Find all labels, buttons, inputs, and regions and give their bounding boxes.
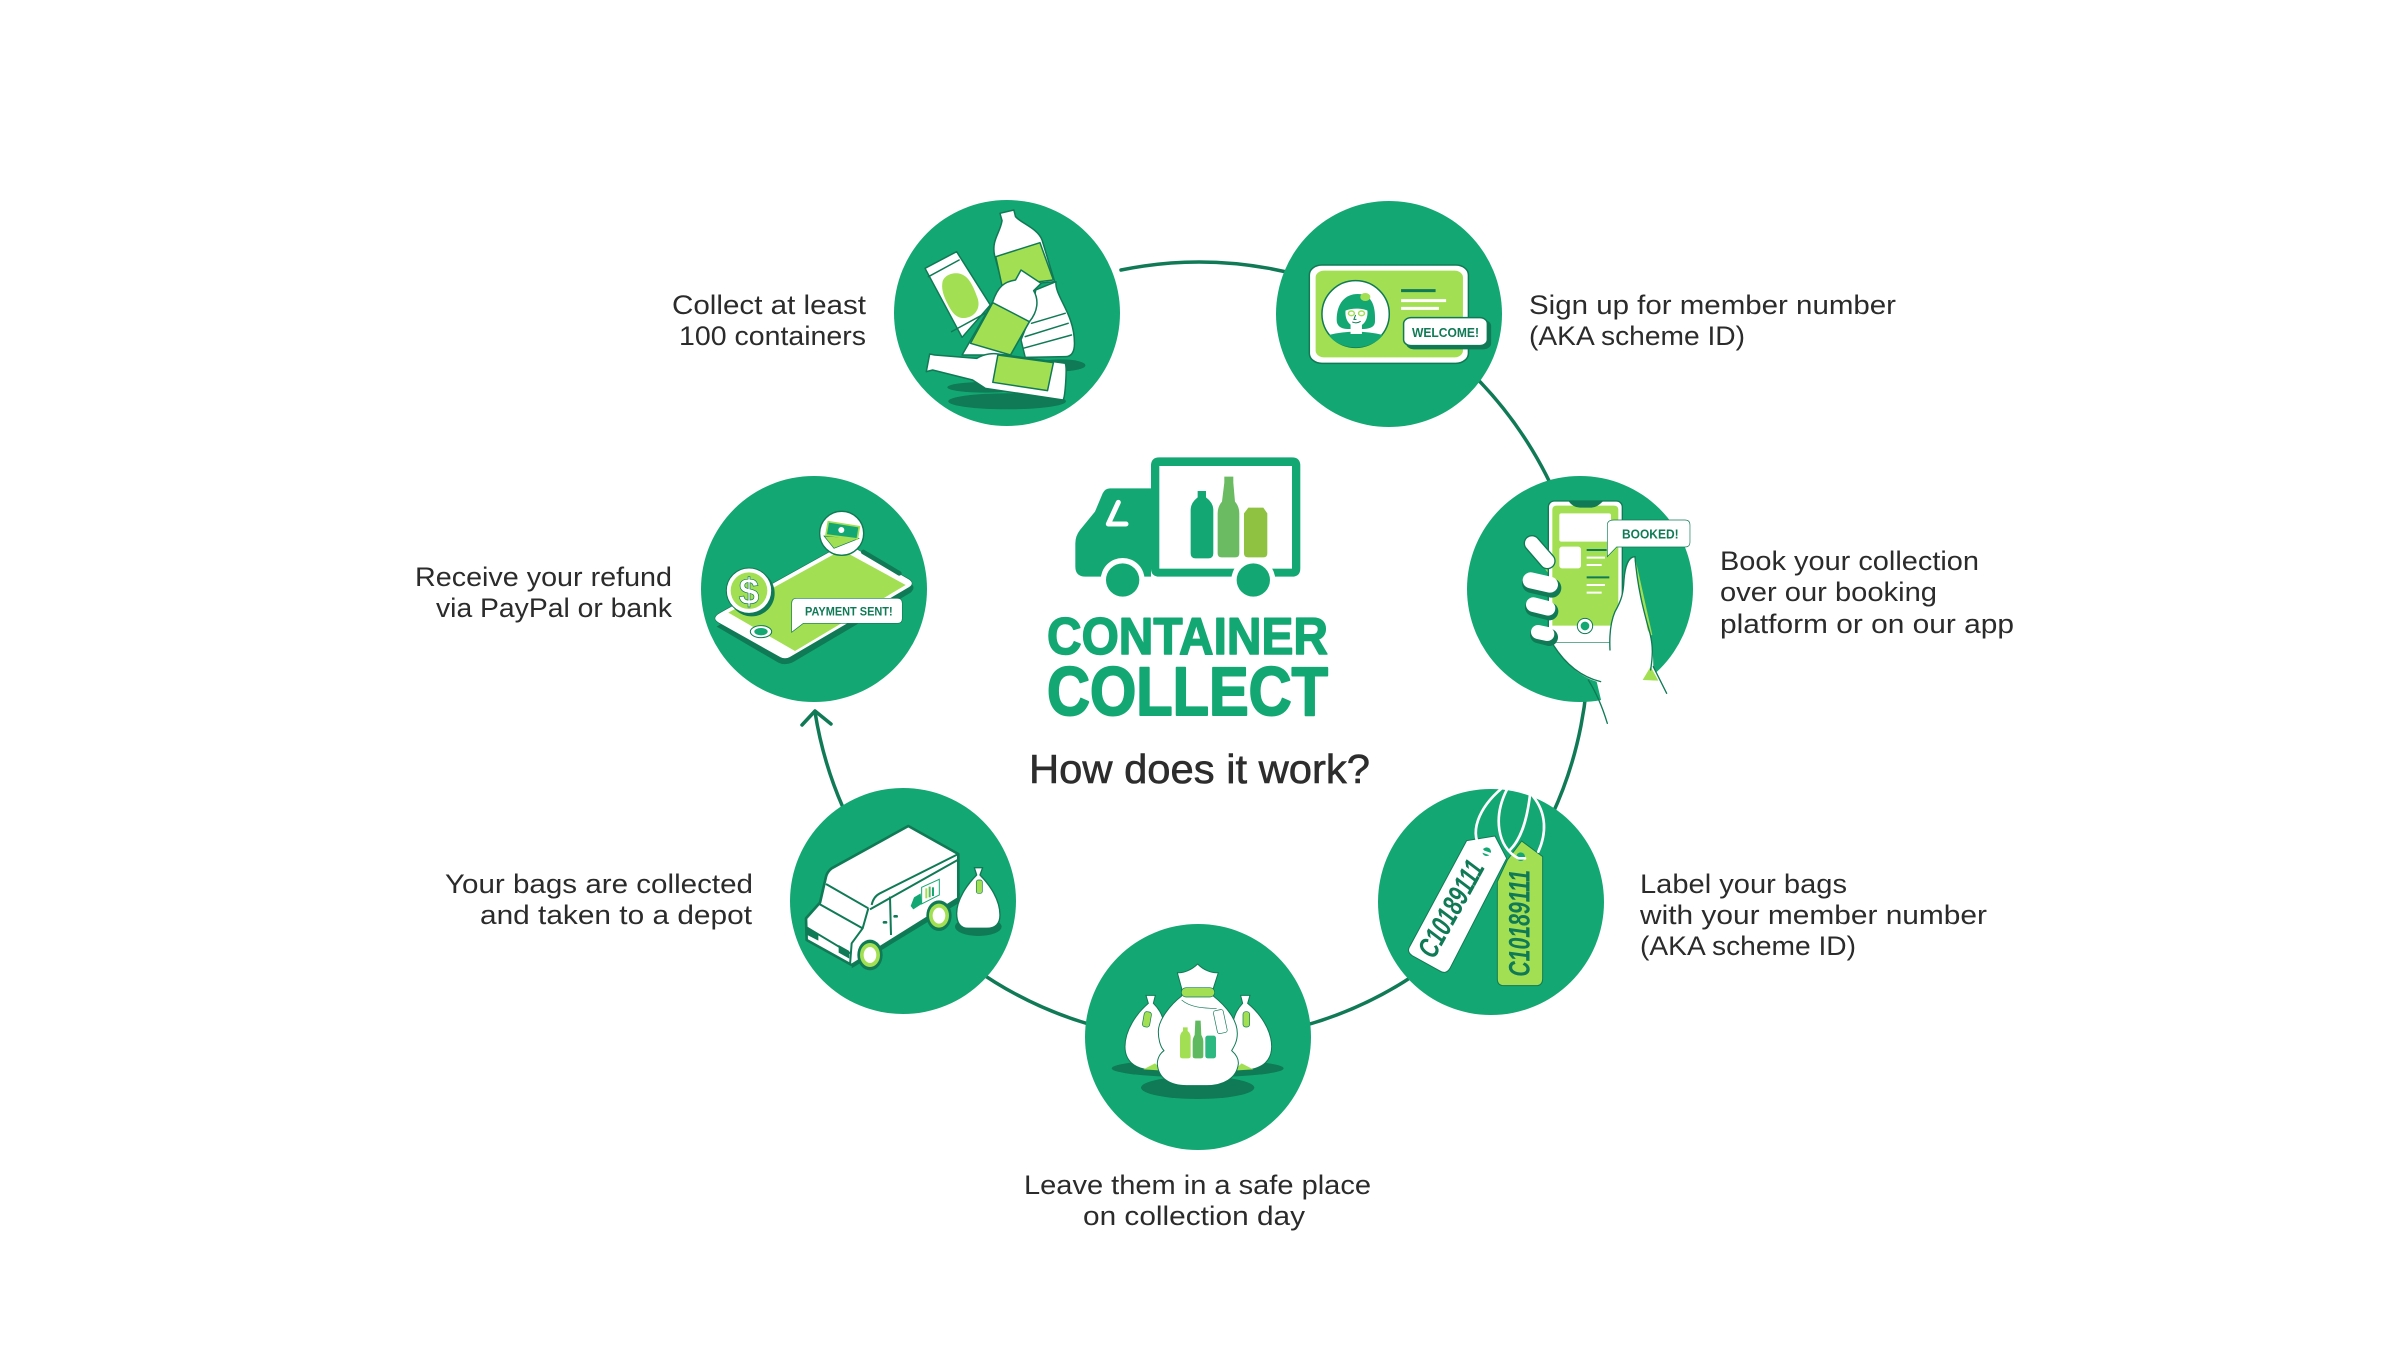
text: step 6 [445, 869, 753, 930]
text: step 5: on collection day [1083, 1201, 1306, 1231]
text: step 1: Collect at least [672, 290, 867, 320]
process ring with arrow [802, 262, 1588, 1040]
panel: step 5 bags [1085, 924, 1311, 1150]
logo wordmark line 2: COLLECT [1047, 653, 1328, 730]
text: step 2: Sign up for member number [1529, 290, 1896, 320]
text: step 1: 100 containers [679, 321, 866, 351]
panel: step 3 book on phone [1467, 476, 1693, 723]
label: booked: BOOKED! [1622, 526, 1679, 541]
text: step 1 [672, 290, 867, 351]
tag code green: C10189111 [1503, 870, 1536, 977]
text: step 3: Book your collection [1720, 546, 1979, 576]
text: step 7 [415, 562, 673, 623]
tag code white: C10189111 [1411, 855, 1492, 963]
panel: step 7 refund [701, 476, 927, 702]
text: step 5 [1024, 1170, 1371, 1231]
text: step 2: (AKA scheme ID) [1529, 321, 1745, 351]
text: step 2 [1529, 290, 1896, 351]
label: payment sent: PAYMENT SENT! [805, 605, 893, 619]
logo: container collect [1047, 457, 1328, 730]
panel: step 6 van [790, 788, 1016, 1014]
text: step 4: (AKA scheme ID) [1640, 931, 1856, 961]
text: step 3: over our booking [1720, 577, 1937, 607]
panel: step 4 label tags [1378, 788, 1604, 1015]
text: step 7: via PayPal or bank [436, 593, 673, 623]
logo wordmark line 1: CONTAINER [1047, 608, 1328, 666]
text: step 4: Label your bags [1640, 869, 1847, 899]
text: step 4: with your member number [1639, 900, 1987, 930]
dollar sign: $ [739, 571, 759, 612]
text: step 6: and taken to a depot [480, 900, 753, 930]
text: step 6: Your bags are collected [445, 869, 753, 899]
text: step 3 [1720, 546, 2014, 639]
text: step 5: Leave them in a safe place [1024, 1170, 1371, 1200]
heading: how does it work: How does it work? [1029, 746, 1370, 792]
logo truck icon [1075, 457, 1300, 602]
label: welcome: WELCOME! [1412, 325, 1479, 340]
text: step 7: Receive your refund [415, 562, 672, 592]
text: step 3: platform or on our app [1720, 609, 2014, 639]
text: step 4 [1639, 869, 1987, 961]
panel: step 1 collect containers [894, 200, 1120, 426]
panel: step 2 member card [1276, 201, 1502, 427]
